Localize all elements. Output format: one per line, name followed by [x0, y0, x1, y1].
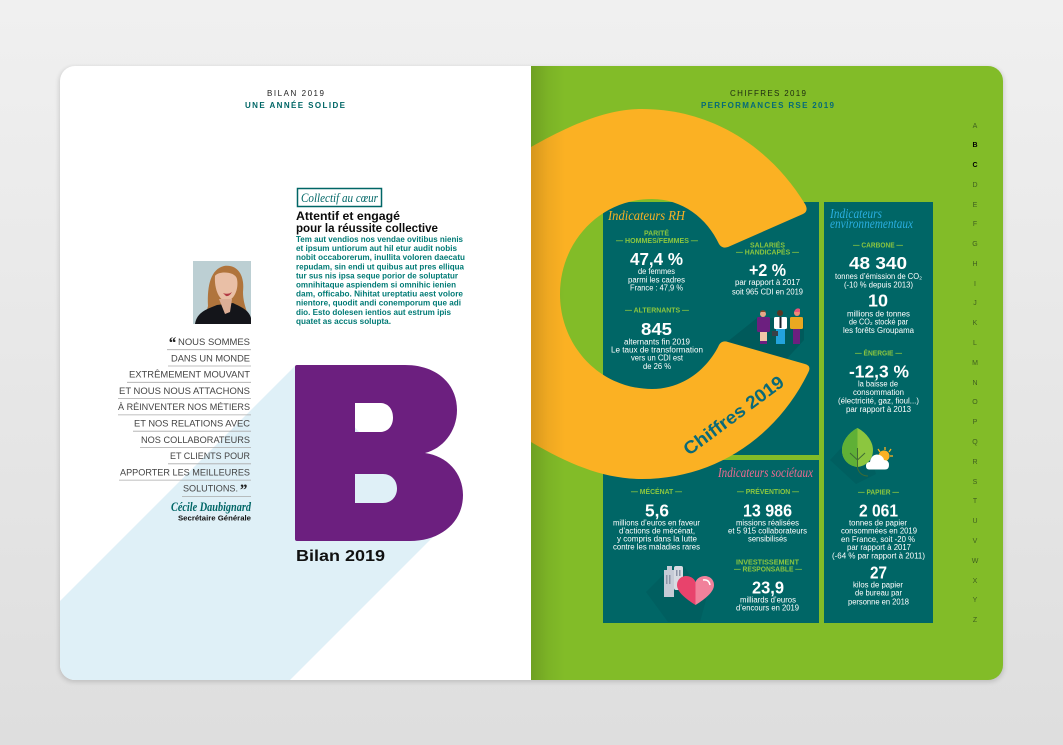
stat: énergie: -12,3 % — [849, 362, 909, 382]
stat: parité: de femmes — [638, 267, 675, 276]
stat: investissement responsable: — RESPONSABLE — — [734, 566, 802, 573]
stat: énergie: par rapport à 2013 — [846, 405, 911, 414]
long shadow of letter B — [60, 365, 446, 680]
icon: buildings and heart — [646, 566, 714, 622]
stat: carbone: 48 340 — [849, 253, 907, 273]
alphabet index: O — [972, 399, 978, 406]
alphabet index: X — [973, 578, 978, 585]
body paragraph: Tem aut vendios nos vendae ovitibus nienis — [296, 235, 464, 244]
icon: leaf, cloud and sun — [842, 428, 893, 476]
panel: indicateurs RH — [603, 202, 819, 455]
stat: alternants: alternants fin 2019 — [624, 337, 690, 346]
stat: carbone — [835, 242, 922, 335]
heading: Chiffres 2019 on C: Chiffres 2019 — [679, 372, 788, 459]
alphabet index: G — [972, 241, 978, 248]
alphabet index: C — [972, 162, 978, 169]
stat: investissement responsable: milliards d’euros — [740, 596, 796, 605]
stat: énergie: consommation — [853, 388, 904, 397]
stat: papier: consommées en 2019 — [841, 527, 917, 536]
header right: CHIFFRES 2019 — [730, 89, 807, 98]
body paragraph: dam, officabo. Nihitat ureptatiu aest volore — [296, 290, 464, 299]
stat: énergie: la baisse de — [858, 380, 898, 389]
alphabet index: P — [973, 419, 978, 426]
stat: papier: personne en 2018 — [848, 597, 909, 606]
heading: Bilan 2019: Bilan 2019 — [296, 548, 385, 565]
stat: carbone: tonnes d’émission de CO₂ — [835, 272, 922, 281]
alphabet index: W — [972, 558, 979, 565]
heading: indicateurs environnementaux — [829, 206, 913, 231]
icon shadow: people — [728, 318, 804, 358]
stat: parité: parmi les cadres — [628, 276, 685, 284]
header left: UNE ANNÉE SOLIDE — [245, 101, 346, 110]
stat: énergie: — ÉNERGIE — — [855, 349, 902, 358]
stat: investissement responsable — [734, 559, 802, 613]
pull quote: EXTRÊMEMENT MOUVANT — [129, 370, 251, 380]
pull quote: SOLUTIONS. — [183, 484, 238, 494]
pull quote: ET CLIENTS POUR — [170, 451, 250, 461]
stat: alternants: — ALTERNANTS — — [625, 308, 689, 315]
quote signature — [171, 499, 251, 522]
stat: papier: (-64 % par rapport à 2011) — [832, 551, 925, 560]
alphabet index: U — [972, 518, 978, 525]
alphabet index: L — [973, 340, 977, 347]
stat: carbone: de CO₂ stocké par — [849, 318, 908, 327]
pull quote: APPORTER LES MEILLEURES — [120, 467, 250, 477]
alphabet index: M — [972, 360, 978, 367]
alphabet index: E — [973, 202, 978, 209]
stat: prévention: et 5 915 collaborateurs — [728, 527, 807, 536]
heading: indicateurs RH: Indicateurs RH — [607, 209, 686, 224]
stat: alternants: Le taux de transformation — [611, 346, 703, 354]
quote signature: Cécile Daubignard — [171, 499, 251, 514]
pull quote: À RÉINVENTER NOS MÉTIERS — [118, 402, 250, 412]
section: indicateurs sociétaux content — [613, 465, 813, 622]
icon: people — [757, 308, 803, 344]
alphabet index: I — [974, 281, 976, 288]
alphabet index: A — [973, 123, 978, 130]
stat: carbone: les forêts Groupama — [843, 326, 915, 335]
alphabet index: B — [972, 142, 978, 149]
stat: salariés handicapés: +2 % — [749, 260, 786, 280]
heading: indicateurs environnementaux: Indicateurs — [829, 206, 882, 221]
stat: mécénat: — MÉCÉNAT — — [631, 487, 682, 496]
stat: alternants: vers un CDI est — [631, 354, 684, 363]
stat: papier: de bureau par — [855, 589, 902, 598]
quote closing mark: ” — [239, 482, 247, 499]
header right — [701, 89, 835, 110]
stat: investissement responsable: 23,9 — [752, 577, 784, 597]
alphabet index: V — [973, 538, 978, 545]
pull quote: NOUS SOMMES — [178, 337, 250, 347]
section: indicateurs environnementaux content — [829, 206, 925, 606]
stat: papier: kilos de papier — [853, 581, 903, 590]
pull quote: ET NOUS NOUS ATTACHONS — [119, 386, 250, 396]
body paragraph: nientore, quodit andi conemporum que adi — [296, 299, 461, 308]
heading: indicateurs sociétaux: Indicateurs sociétaux — [717, 465, 813, 480]
body paragraph: repudam, sin endi ut quibus aut pres elliqua — [296, 262, 465, 271]
pull quote: NOS COLLABORATEURS — [141, 435, 250, 445]
quote signature: Secrétaire Générale — [178, 514, 251, 522]
stat: prévention — [728, 487, 807, 544]
subheading — [296, 211, 438, 235]
stat: mécénat — [613, 487, 700, 552]
alphabet index: Z — [973, 617, 978, 624]
stat: carbone: millions de tonnes — [847, 310, 910, 319]
alphabet index: K — [973, 320, 978, 327]
alphabet index — [972, 123, 979, 624]
stat: salariés handicapés: — HANDICAPÉS — — [736, 247, 799, 256]
alphabet index: Q — [972, 439, 978, 446]
pull quote — [118, 335, 251, 499]
left page background — [60, 66, 531, 680]
stat: salariés handicapés — [732, 240, 803, 296]
panel: indicateurs environnementaux background — [824, 202, 933, 623]
body paragraph: tur sus nis ipsa seque porior de soluptatur — [296, 271, 458, 280]
stat: prévention: sensibilisés — [748, 535, 787, 544]
stat: papier — [832, 489, 925, 606]
alphabet index: F — [973, 221, 977, 228]
stat: papier: 2 061 — [859, 501, 898, 521]
stat: alternants — [611, 308, 703, 371]
big letter B — [295, 365, 463, 541]
stat: salariés handicapés: par rapport à 2017 — [735, 278, 800, 287]
spine shading — [531, 66, 554, 680]
stat: papier: par rapport à 2017 — [847, 543, 911, 552]
brochure spread — [60, 66, 1003, 680]
header right: PERFORMANCES RSE 2019 — [701, 101, 835, 110]
stat: papier: tonnes de papier — [849, 519, 907, 528]
stat: alternants: 845 — [641, 319, 672, 339]
big letter C — [531, 109, 809, 479]
alphabet index: H — [972, 261, 978, 268]
stat: énergie: (électricité, gaz, fioul...) — [838, 397, 919, 406]
stat: papier: en France, soit -20 % — [841, 535, 915, 544]
tag: Collectif au coeur: Collectif au cœur — [301, 190, 379, 205]
stat: carbone: (-10 % depuis 2013) — [844, 280, 913, 289]
pull quote: DANS UN MONDE — [171, 353, 250, 363]
stat: investissement responsable: d’encours en 2019 — [736, 604, 799, 613]
stat: mécénat: d’actions de mécénat, — [619, 527, 695, 536]
stat: investissement responsable: INVESTISSEMENT — [736, 559, 800, 566]
subheading: Attentif et engagé — [296, 211, 400, 223]
stat: parité: PARITÉ — [644, 228, 669, 238]
stat: prévention: missions réalisées — [736, 519, 799, 528]
alphabet index: S — [973, 479, 978, 486]
stat: carbone: 10 — [868, 290, 888, 310]
stat: parité: 47,4 % — [630, 249, 683, 269]
header left: BILAN 2019 — [267, 89, 325, 98]
body paragraph: et ipsum untiorum aut hil etur audit nobis — [296, 244, 458, 253]
stat: salariés handicapés: SALARIÉS — [750, 240, 785, 249]
stat: parité: — HOMMES/FEMMES — — [616, 238, 698, 245]
alphabet index: D — [972, 182, 978, 189]
body paragraph: dio. Esto dolesen ientios aut estrum ipis — [296, 308, 452, 317]
stat: prévention: — PRÉVENTION — — [737, 487, 799, 496]
stat: prévention: 13 986 — [743, 501, 792, 521]
alphabet index: R — [972, 459, 978, 466]
stat: carbone: — CARBONE — — [853, 242, 903, 249]
stat: papier: 27 — [870, 562, 887, 582]
right page background — [531, 66, 1003, 680]
subheading: pour la réussite collective — [296, 223, 438, 235]
body paragraph: nobit occaborerum, inullita voloren daecatu — [296, 253, 465, 262]
portrait photo — [193, 261, 251, 324]
panel: indicateurs sociétaux background — [603, 460, 819, 623]
alphabet index: J — [973, 300, 977, 307]
body paragraph: quatet as accus solupta. — [296, 317, 391, 326]
alphabet index: Y — [973, 597, 978, 604]
stat: salariés handicapés: soit 965 CDI en 2019 — [732, 287, 803, 296]
header left — [245, 89, 346, 110]
stat: papier: — PAPIER — — [858, 489, 899, 496]
stat: mécénat: contre les maladies rares — [613, 543, 700, 552]
body paragraph — [296, 235, 465, 326]
alphabet index: T — [973, 498, 978, 505]
body paragraph: omnihitaque aspiendem si omnihic ienien — [296, 280, 456, 290]
stat: mécénat: y compris dans la lutte — [617, 535, 697, 544]
stat: mécénat: 5,6 — [645, 501, 669, 521]
stat: énergie — [838, 349, 919, 414]
stat: parité: France : 47,9 % — [630, 284, 683, 293]
pull quote: ET NOS RELATIONS AVEC — [134, 418, 251, 428]
section: indicateurs RH content — [607, 209, 803, 371]
alphabet index: N — [972, 380, 978, 387]
heading: indicateurs environnementaux: environnementaux — [830, 216, 913, 231]
stat: alternants: de 26 % — [643, 362, 671, 371]
quote opening mark: “ — [168, 335, 176, 352]
stat: parité — [616, 228, 698, 293]
stat: mécénat: millions d’euros en faveur — [613, 519, 700, 528]
